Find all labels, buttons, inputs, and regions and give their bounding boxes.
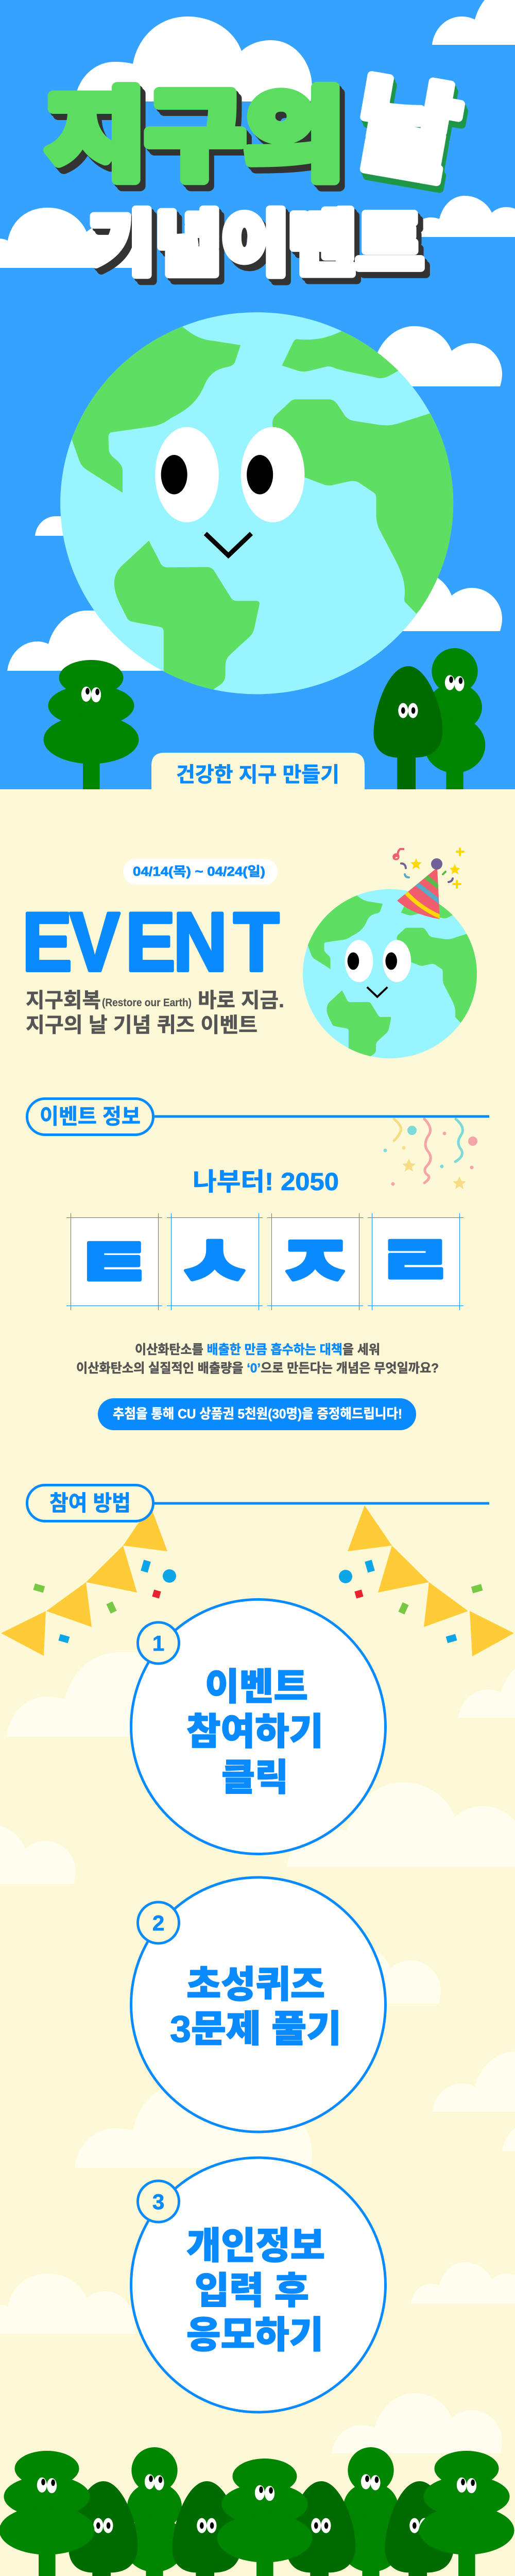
illustration: right back tree [424,648,485,878]
date pill: 04/14(목) ~ 04/24(일) [133,865,265,879]
tile: ㅅ: ㅅ [176,1222,253,1303]
illustration: right front tree [373,666,442,886]
step 2 label: 3문제 풀기 [170,2009,341,2050]
tile: ㅌ: ㅌ [76,1224,153,1304]
text block: event description: 바로 지금. [198,989,284,1012]
text block: event description [26,989,284,1037]
decoration: pale background clouds [0,1652,515,2453]
text block: quiz question [76,1343,439,1376]
tile: ㅈ [267,1213,363,1310]
tab: 건강한 지구 만들기: 건강한 지구 만들기 [176,764,339,786]
step 1 badge: 1 [152,1631,164,1655]
prize pill [98,1398,416,1430]
tab: 건강한 지구 만들기 [151,753,365,789]
tile: ㅅ [167,1213,263,1310]
cream section top edge [0,789,515,2576]
step 3 label [186,2226,325,2356]
illustration: forest of trees [0,2447,514,2576]
text block: quiz question: 이산화탄소를 배출한 만큼 흡수하는 대책을 세워 [135,1343,380,1357]
decoration: right bunting [339,1505,514,1656]
section heading: 이벤트 정보: 이벤트 정보 [40,1105,141,1128]
title: 지구의: 지구의 [46,81,344,192]
illustration: party hat and sparkles [393,849,464,919]
step 3 badge [138,2181,179,2222]
title: 기념이벤트: 기념이벤트 [88,205,423,283]
text block: event description: 지구회복 [26,989,101,1012]
decoration: streamers and confetti [383,1119,477,1189]
text block: event description: 지구의 날 기념 퀴즈 이벤트 [26,1014,258,1037]
step 3 label: 응모하기 [186,2315,323,2356]
text block: quiz question: 이산화탄소의 실질적인 배출량을 ‘0’으로 만든다는 개념은 무엇일까요? [76,1361,439,1376]
section heading: 참여 방법: 참여 방법 [49,1491,131,1515]
panel: sky hero [0,0,515,789]
step 2 badge [138,1902,179,1943]
tile: ㅈ: ㅈ [277,1223,354,1303]
section heading: 이벤트 정보 [27,1098,489,1134]
text block: event description: (Restore our Earth) [102,997,192,1009]
step 1 label: 이벤트 [205,1667,308,1708]
illustration: left tree [43,660,139,887]
heading: EVENT: EVENT [22,895,279,989]
step 1 label: 참여하기 [186,1711,323,1753]
tile: ㄹ: ㄹ [377,1222,454,1303]
step 2 label: 초성퀴즈 [186,1964,325,2006]
illustration: smiling earth [33,300,476,710]
step 3 circle [131,2158,385,2412]
tile: ㄹ [368,1213,464,1310]
title: 날: 날 [346,63,468,198]
tile: ㅌ [66,1213,162,1310]
illustration: small earth [290,884,487,1065]
step 1 circle [131,1599,385,1854]
step 3 badge: 3 [152,2190,164,2214]
step 3 label: 입력 후 [195,2270,309,2312]
heading: 나부터! 2050: 나부터! 2050 [193,1168,339,1196]
step 2 label [170,1964,341,2050]
step 3 label: 개인정보 [186,2226,325,2267]
date pill [123,859,278,885]
step 2 circle [131,1877,385,2132]
prize pill: 추첨을 통해 CU 상품권 5천원(30명)을 증정해드립니다! [113,1406,402,1421]
step 1 label: 클릭 [221,1757,288,1799]
section heading: 참여 방법 [1,1485,489,1656]
step 1 badge [138,1622,179,1664]
quiz tiles [66,1213,464,1310]
step 2 badge: 2 [152,1911,164,1935]
step 1 label [186,1667,323,1799]
decoration: left bunting [1,1505,176,1656]
